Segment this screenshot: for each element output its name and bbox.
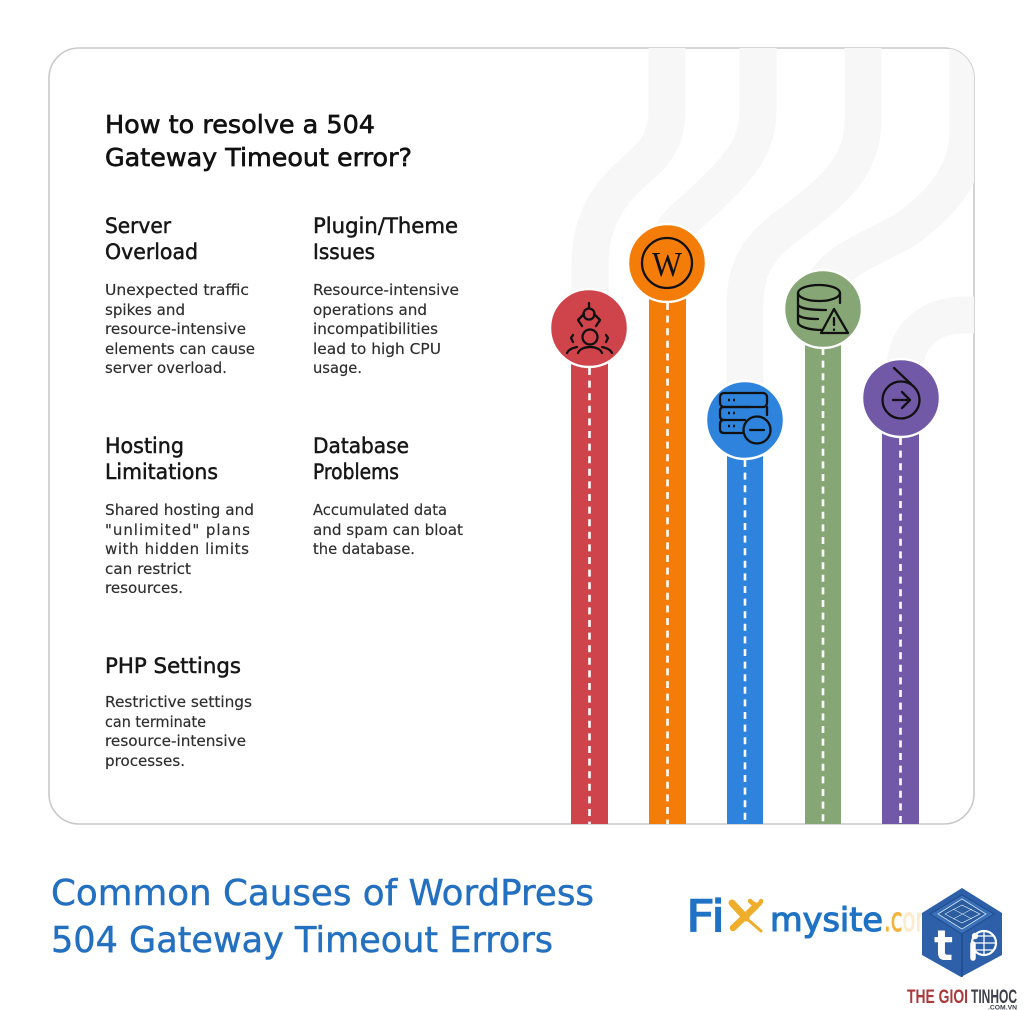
text block: php settings — [105, 654, 252, 770]
title: how to resolve — [105, 110, 412, 172]
purple road with icon: arrow circle — [862, 359, 940, 824]
red road with icon: people overload — [550, 289, 628, 824]
text block: plugin/theme issues: Resource-intensive — [313, 281, 459, 299]
text block: server overload: resource-intensive — [105, 320, 246, 338]
logo: the gioi tinhoc cube: THE GIOI — [907, 987, 968, 1008]
icon: i with globe — [972, 931, 996, 955]
text block: plugin/theme issues: lead to high CPU — [313, 340, 441, 358]
text block: server overload: server overload. — [105, 359, 227, 377]
text block: plugin/theme issues — [313, 214, 459, 377]
text block: hosting limitations: with hidden limits — [105, 540, 249, 558]
text block: server overload: Overload — [105, 240, 198, 264]
text block: server overload: Server — [105, 214, 171, 238]
text block: php settings: Restrictive settings — [105, 693, 252, 711]
text block: server overload: spikes and — [105, 301, 185, 319]
text block: database problems: Problems — [313, 460, 399, 484]
logo: fixmysite: mysite — [770, 900, 883, 939]
text block: hosting limitations: Hosting — [105, 434, 184, 458]
text block: plugin/theme issues: Issues — [313, 240, 375, 264]
text block: hosting limitations: "unlimited" plans — [105, 521, 250, 539]
text block: hosting limitations: resources. — [105, 579, 183, 597]
title: how to resolve: Gateway Timeout error? — [105, 143, 412, 172]
icon: wrench and screwdriver — [732, 901, 761, 931]
text block: plugin/theme issues: incompatibilities — [313, 320, 438, 338]
orange road with icon: wordpress — [628, 224, 706, 824]
card panel — [49, 48, 974, 824]
green road with icon: database warning — [784, 270, 862, 824]
text block: php settings: can terminate — [105, 713, 206, 731]
text block: database problems: Database — [313, 434, 409, 458]
text block: database problems: the database. — [313, 540, 415, 558]
text block: database problems — [313, 434, 463, 558]
text block: hosting limitations: can restrict — [105, 560, 191, 578]
text block: database problems: Accumulated data — [313, 501, 447, 519]
logo: fixmysite: .com — [884, 900, 936, 939]
text block: server overload — [105, 214, 255, 377]
blue road with icon: server minus — [706, 381, 784, 824]
orange road with icon: wordpress: W — [652, 245, 682, 284]
title: how to resolve: How to resolve a 504 — [105, 110, 375, 139]
text block: server overload: Unexpected traffic — [105, 281, 249, 299]
text block: plugin/theme issues: operations and — [313, 301, 427, 319]
bottom title: Common Causes of WordPress — [51, 873, 594, 914]
text block: php settings: processes. — [105, 752, 185, 770]
logo: fixmysite: Fi — [686, 891, 725, 942]
logo: the gioi tinhoc cube — [907, 888, 1017, 1010]
text block: plugin/theme issues: usage. — [313, 359, 362, 377]
text block: plugin/theme issues: Plugin/Theme — [313, 214, 458, 238]
text block: hosting limitations: Shared hosting and — [105, 501, 254, 519]
logo: fixmysite — [686, 891, 936, 942]
text block: hosting limitations — [105, 434, 254, 597]
text block: server overload: elements can cause — [105, 340, 255, 358]
icon: letter t: t — [934, 921, 953, 970]
bottom title — [51, 873, 594, 961]
bottom title: 504 Gateway Timeout Errors — [51, 920, 553, 961]
text block: database problems: and spam can bloat — [313, 521, 463, 539]
background faded roads — [648, 48, 974, 334]
text block: php settings: resource-intensive — [105, 732, 246, 750]
text block: hosting limitations: Limitations — [105, 460, 218, 484]
text block: php settings: PHP Settings — [105, 654, 241, 678]
